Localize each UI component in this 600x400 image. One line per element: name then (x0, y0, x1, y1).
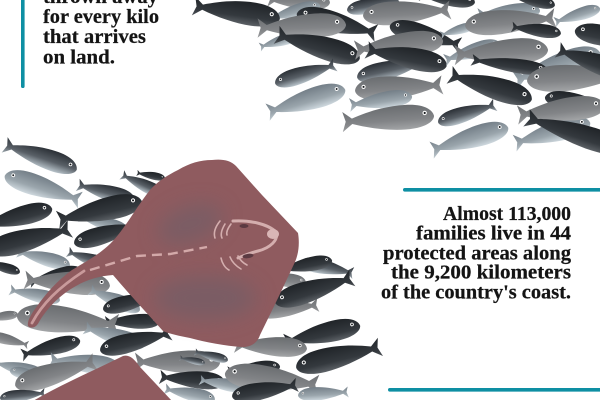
school of fish: lower left (0, 135, 384, 400)
stingray: large (28, 160, 299, 347)
accent bar: middle right (403, 188, 600, 192)
text block: protected areas: Almost 113,000 (443, 203, 571, 225)
ray shadow markings (152, 195, 257, 320)
school of fish: top right (192, 0, 600, 161)
text block: thrown away per kilo: for every kilo (43, 6, 159, 28)
text block: protected areas: families live in 44 (416, 222, 571, 244)
accent bar: bottom right (388, 388, 600, 392)
ray head markings (214, 221, 279, 270)
stingray: small bottom (33, 356, 172, 400)
text block: thrown away per kilo: that arrives (43, 26, 146, 48)
text block: protected areas (381, 203, 571, 304)
text block: protected areas: protected areas along (383, 242, 571, 264)
text block: thrown away per kilo (43, 0, 159, 68)
ray tail stripe (32, 271, 84, 323)
text block: thrown away per kilo: on land. (43, 46, 115, 68)
text block: protected areas: the 9,200 kilometers (391, 262, 571, 284)
accent bar: top left (21, 0, 25, 88)
text block: protected areas: of the country's coast. (381, 282, 571, 304)
ray dashes (90, 247, 207, 270)
